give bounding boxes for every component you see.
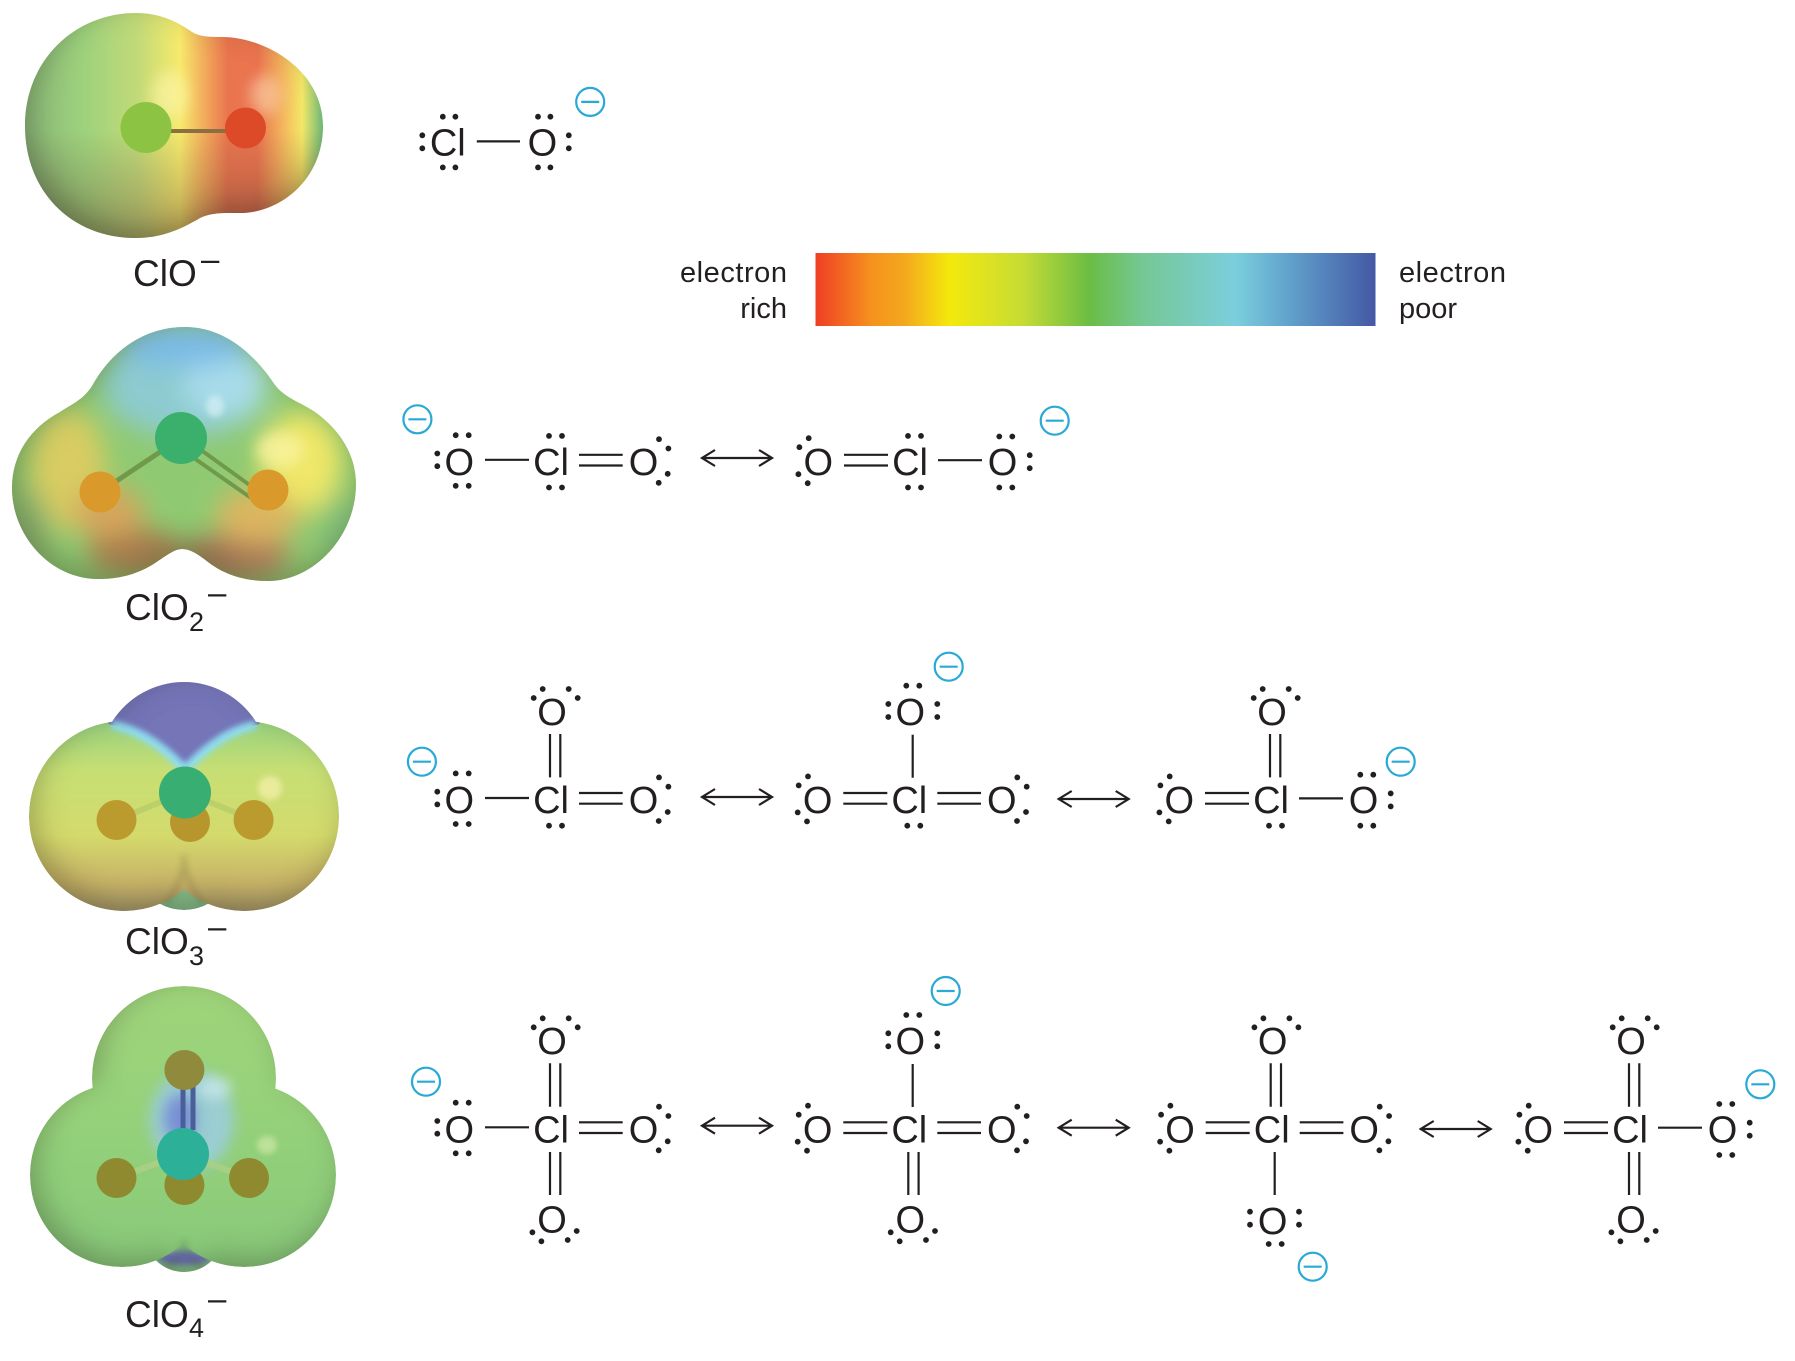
Lewis structure: ClO- <box>422 117 569 167</box>
Lewis structure: ClO3- resonance 1: O <box>445 780 474 822</box>
Lewis structure: ClO4- resonance 3: O <box>1349 1110 1379 1152</box>
label: ClO4- <box>125 1280 227 1343</box>
Lewis structure: ClO4- resonance 2: O <box>987 1110 1017 1152</box>
panel: ClO- electrostatic potential model <box>20 8 330 243</box>
Lewis structure: ClO3- resonance 3: O <box>1349 780 1378 822</box>
charge: ClO4- resonance 4 <box>1746 1070 1774 1098</box>
Lewis structure: ClO3- resonance 1: O <box>537 692 567 734</box>
atom: O left <box>80 472 120 512</box>
Lewis structure: ClO3- resonance 1: O <box>629 780 658 822</box>
Lewis structure: ClO2- resonance 1: O <box>445 442 474 484</box>
Lewis structure: ClO2- resonance 2: Cl <box>892 442 928 484</box>
atom: Cl <box>120 102 172 153</box>
label: electron poor: electron <box>1399 257 1506 289</box>
colour bar <box>816 253 1376 326</box>
Lewis structure: ClO3- resonance 2 <box>798 686 1027 826</box>
label: ClO-: – <box>201 240 220 278</box>
atom: Cl <box>157 1128 209 1180</box>
surface: ClO- <box>20 8 330 243</box>
legend: electron density colour scale <box>680 253 1506 326</box>
surface: ClO3- <box>29 670 339 911</box>
Lewis structure: ClO4- resonance 1: O <box>445 1110 474 1152</box>
panel: ClO3- electrostatic potential model <box>29 670 339 911</box>
Lewis structure: ClO3- resonance 1: Cl <box>533 780 569 822</box>
Lewis structure: ClO2- resonance 1 <box>437 435 668 488</box>
atom: O <box>225 108 266 148</box>
panel: ClO2- electrostatic potential model <box>12 327 356 581</box>
bonds: ClO4- <box>183 1086 193 1130</box>
label: electron rich: electron <box>680 257 787 289</box>
atom: O right <box>248 470 288 510</box>
atom: O left <box>96 1158 136 1198</box>
Lewis structure: ClO3- resonance 3: O <box>1165 780 1194 822</box>
label: electron rich <box>680 257 787 325</box>
Lewis structure: ClO4- resonance 4: O <box>1708 1110 1737 1152</box>
Lewis structure: ClO4- resonance 4: O <box>1524 1110 1553 1152</box>
bonds: ClO2- <box>100 438 181 492</box>
label: ClO3-: 3 <box>189 941 204 971</box>
arrow: ClO4- resonance 3-4 <box>1421 1121 1491 1137</box>
Lewis structure: ClO3- resonance 2: O <box>896 692 925 734</box>
label: electron rich: rich <box>740 293 787 325</box>
Lewis structure: ClO4- resonance 2 <box>798 1015 1027 1242</box>
atom: O right <box>229 1158 269 1198</box>
charge: ClO- <box>576 88 604 116</box>
atom: O back <box>170 802 210 842</box>
label: ClO3-: ClO <box>125 921 189 962</box>
Lewis structure: ClO4- resonance 1: O <box>537 1021 567 1063</box>
charge: ClO4- resonance 2 <box>932 977 960 1005</box>
Lewis structure: ClO-: O <box>528 122 557 164</box>
charge: ClO2- resonance 1 <box>403 405 431 433</box>
charge: ClO2- resonance 2 <box>1041 407 1069 435</box>
Lewis structure: ClO2- resonance 1: O <box>629 442 658 484</box>
label: ClO2-: ClO <box>125 587 189 628</box>
arrow: ClO4- resonance 1-2 <box>702 1118 772 1134</box>
Lewis structure: ClO3- resonance 1 <box>437 689 668 826</box>
Lewis structure: ClO-: Cl <box>430 122 466 164</box>
arrow: ClO4- resonance 2-3 <box>1059 1120 1129 1136</box>
charge: ClO3- resonance 1 <box>408 748 436 776</box>
Lewis structure: ClO4- resonance 2: O <box>896 1200 925 1242</box>
Lewis structure: ClO3- resonance 2: Cl <box>891 780 927 822</box>
label: ClO4-: – <box>208 1280 227 1317</box>
charge: ClO3- resonance 3 <box>1387 748 1415 776</box>
label: ClO2- <box>125 574 227 637</box>
label: ClO2-: 2 <box>189 607 204 637</box>
Lewis structure: ClO3- resonance 2: O <box>987 780 1017 822</box>
double bond: ClO2- <box>181 442 262 500</box>
Lewis structure: ClO3- resonance 3: O <box>1257 692 1287 734</box>
Lewis structure: ClO2- resonance 2: O <box>988 442 1017 484</box>
atom: O right <box>234 800 274 840</box>
label: electron poor: poor <box>1399 293 1457 325</box>
Lewis structure: ClO4- resonance 1: O <box>537 1200 567 1242</box>
bond: Cl-O <box>146 129 245 133</box>
label: ClO3- <box>125 908 227 971</box>
Lewis structure: ClO3- resonance 3 <box>1159 689 1391 826</box>
label: ClO4-: 4 <box>189 1313 204 1343</box>
Lewis structure: ClO2- resonance 1: Cl <box>533 442 569 484</box>
Lewis structure: ClO4- resonance 3 <box>1160 1018 1389 1244</box>
label: ClO-: ClO <box>133 253 197 294</box>
bonds: ClO3- <box>116 792 254 820</box>
charge: ClO3- resonance 2 <box>935 653 963 681</box>
Lewis structure: ClO2- resonance 2 <box>798 436 1030 488</box>
Lewis structure: ClO3- resonance 2: O <box>803 780 832 822</box>
arrow: ClO3- resonance 1-2 <box>702 789 772 805</box>
label: ClO2-: – <box>208 574 227 611</box>
atom: O left <box>96 800 136 840</box>
Lewis structure: ClO4- resonance 4: O <box>1616 1021 1646 1063</box>
surface: ClO4- <box>30 986 336 1272</box>
label: ClO- <box>133 240 220 294</box>
panel: ClO4- electrostatic potential model <box>30 986 336 1272</box>
Lewis structure: ClO4- resonance 3: Cl <box>1254 1110 1290 1152</box>
atom: O top <box>164 1050 204 1090</box>
Lewis structure: ClO4- resonance 1 <box>437 1018 668 1242</box>
atom: O back <box>164 1165 204 1205</box>
label: electron poor <box>1399 257 1506 325</box>
Lewis structure: ClO4- resonance 4: Cl <box>1612 1110 1648 1152</box>
charge: ClO4- resonance 3 <box>1299 1253 1327 1281</box>
charge: ClO4- resonance 1 <box>412 1068 440 1096</box>
Lewis structure: ClO4- resonance 2: O <box>803 1110 832 1152</box>
atom: Cl <box>155 412 207 464</box>
Lewis structure: ClO4- resonance 4 <box>1518 1018 1750 1242</box>
Lewis structure: ClO2- resonance 2: O <box>804 442 833 484</box>
arrow: ClO2- resonance <box>702 450 772 466</box>
atom: Cl <box>159 766 211 818</box>
Lewis structure: ClO4- resonance 1: Cl <box>533 1110 569 1152</box>
label: ClO4-: ClO <box>125 1294 189 1335</box>
Lewis structure: ClO4- resonance 1: O <box>629 1110 658 1152</box>
side bonds: ClO4- <box>116 1154 249 1178</box>
Lewis structure: ClO4- resonance 4: O <box>1616 1200 1646 1242</box>
label: ClO3-: – <box>208 908 227 945</box>
Lewis structure: ClO4- resonance 3: O <box>1165 1110 1195 1152</box>
Lewis structure: ClO3- resonance 3: Cl <box>1253 780 1289 822</box>
Lewis structure: ClO4- resonance 2: O <box>896 1021 925 1063</box>
Lewis structure: ClO4- resonance 2: Cl <box>891 1110 927 1152</box>
surface: ClO2- <box>12 327 356 581</box>
Lewis structure: ClO4- resonance 3: O <box>1258 1201 1287 1243</box>
arrow: ClO3- resonance 2-3 <box>1059 791 1129 807</box>
Lewis structure: ClO4- resonance 3: O <box>1258 1021 1287 1063</box>
